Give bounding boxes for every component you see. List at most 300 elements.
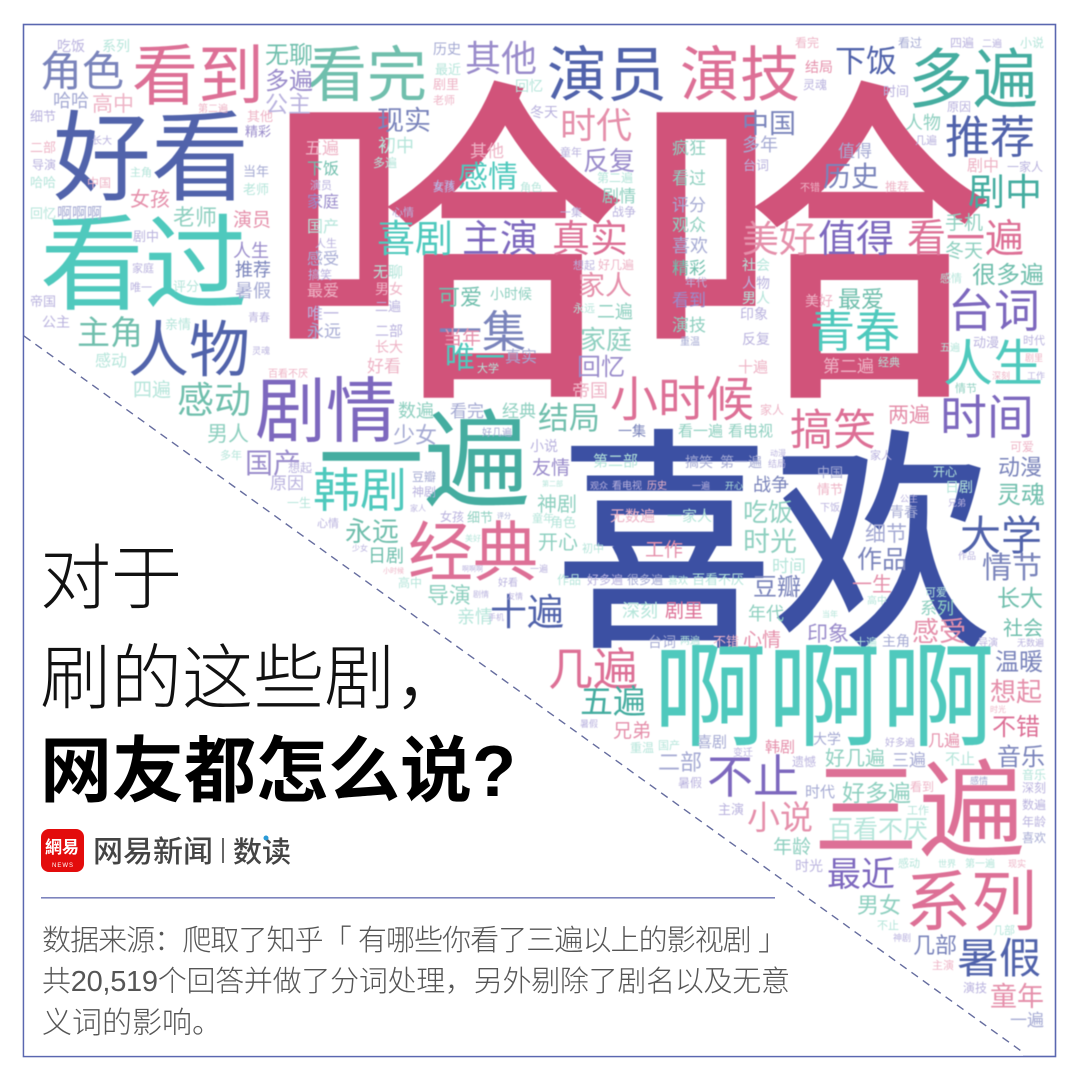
word group: small words left: 老师 — [243, 182, 269, 197]
word group: words inside second 哈: 感受 — [912, 617, 966, 647]
word group: words around 喜欢: 喜欢 — [668, 574, 688, 587]
word group: words inside second 哈: 时间 — [883, 84, 909, 99]
word group: words inside first 哈: 真实 — [505, 348, 537, 366]
word group: words inside second 哈: 公主 — [900, 493, 918, 504]
word group: words inside first 哈: 感情 — [458, 161, 518, 194]
word group: small words left: 唯一 — [130, 281, 152, 294]
word group: medium words: 真实 — [552, 219, 628, 261]
word: 经典: 经典 — [408, 516, 538, 589]
word group: words inside first 哈: 第二遍 — [597, 171, 633, 185]
word group: small words bottom right: 喜剧 — [697, 734, 727, 751]
word group: words around 喜欢: 时间 — [772, 557, 806, 576]
word group: small words bottom right: 演技 — [963, 980, 987, 995]
word group: words inside first 哈: 心情 — [392, 206, 414, 219]
word group: medium words: 小时候 — [610, 374, 754, 427]
word group: small words left: 百看不厌 — [268, 367, 308, 380]
word: 好看: 好看 — [53, 103, 249, 213]
word group: words inside second 哈: 印象 — [740, 306, 768, 322]
word group: words inside first 哈: 反复 — [583, 146, 635, 176]
word group: words inside first 哈: 好看 — [367, 357, 401, 376]
word group: small words left: 公主 — [42, 314, 70, 330]
word group: words around 喜欢: 历史 — [647, 480, 667, 492]
word group: words inside second 哈: 日剧 — [945, 479, 973, 495]
word group: words inside first 哈: 经典 — [502, 402, 536, 421]
word group: words inside second 哈: 中国 — [817, 465, 843, 480]
brand name: 网易新闻 — [93, 836, 213, 869]
word group: words inside second 哈: 剧里 — [1025, 353, 1043, 363]
word group: medium words: 主角 — [77, 314, 143, 351]
word group: small words left: 多年 — [220, 448, 242, 462]
word: 剧情: 剧情 — [255, 373, 397, 452]
word group: words inside second 哈: 青春 — [890, 504, 918, 520]
word group: words inside second 哈: 人物 — [742, 275, 770, 291]
word group: words inside first 哈: 看完 — [450, 402, 484, 421]
word group: medium words: 人生 — [943, 336, 1043, 392]
word group: words inside second 哈 — [572, 35, 1045, 647]
word group: words around 喜欢: 工作 — [645, 539, 683, 561]
word group: words inside first 哈: 无聊 — [373, 264, 403, 281]
word group: words inside second 哈: 家人 — [870, 448, 892, 462]
word group: words inside first 哈: 感受 — [307, 250, 339, 268]
word group: words inside second 哈: 四遍 — [950, 36, 974, 50]
word group: medium words: 值得 — [818, 219, 894, 261]
word group: small words bottom right: 深刻 — [1022, 781, 1046, 795]
word group: words inside first 哈: 豆瓣 — [412, 470, 436, 484]
word group: words inside first 哈: 最近 — [435, 62, 461, 77]
word group: small words left: 精彩 — [245, 124, 271, 139]
word group: words inside second 哈: 美好 — [805, 293, 833, 309]
word group: words around 喜欢: 角色 — [550, 515, 576, 530]
word group: words inside second 哈: 两遍 — [888, 404, 930, 427]
word group: medium words: 五遍 — [580, 683, 646, 720]
word group: medium words: 剧中 — [968, 172, 1042, 213]
word group: small words bottom right: 数遍 — [1022, 797, 1046, 812]
word group: words inside first 哈: 啊啊啊 — [462, 565, 483, 573]
word group: small words left: 男人 — [207, 423, 249, 446]
word group: small words bottom right: 好多遍 — [842, 780, 911, 806]
word group: words inside first 哈: 冬天 — [530, 104, 558, 120]
word group: small words left: 女孩 — [130, 188, 170, 211]
icon: netease news red square — [41, 829, 84, 872]
word: 看到: 看到 — [132, 39, 264, 113]
word group: medium words: 最近 — [827, 856, 895, 894]
word group: words around 喜欢: 小说 — [530, 438, 558, 454]
word group: small words left — [30, 38, 422, 590]
word group: words inside second 哈: 情节 — [817, 482, 843, 497]
word group: small words left: 家庭 — [132, 261, 154, 275]
word group: words inside second 哈: 社会 — [1003, 617, 1043, 640]
word group: words around 喜欢: 初中 — [582, 541, 604, 555]
word group: small words left: 少女 — [352, 543, 368, 553]
word group: words inside second 哈: 动漫 — [973, 335, 999, 350]
word group: words inside second 哈: 下饭 — [820, 502, 840, 514]
word group: words around 喜欢: 一遍 — [530, 563, 548, 574]
word group: words inside first 哈 — [305, 41, 636, 627]
word group: small words bottom right: 好几遍 — [825, 747, 885, 770]
word group: words around 喜欢: 看电视 — [728, 423, 773, 440]
word group: small words bottom right: 主演 — [932, 958, 954, 972]
word group: medium words: 唯一 — [445, 342, 505, 375]
word group: small words bottom right: 时光 — [990, 704, 1006, 714]
word group: words inside first 哈: 手机 — [488, 612, 504, 622]
word group: medium words: 其他 — [465, 38, 537, 79]
word group: words around 喜欢: 开心 — [538, 532, 578, 554]
word group: small words left: 小时候 — [383, 566, 404, 575]
word group: words around 喜欢: 一集 — [618, 423, 646, 439]
word group: small words left: 吃饭 — [57, 38, 85, 54]
word group: medium words: 看完 — [307, 42, 427, 109]
word group: words inside second 哈: 手机 — [945, 212, 983, 234]
word group: small words bottom right — [580, 649, 1046, 1030]
word group: words around 喜欢: 心情 — [743, 629, 781, 651]
word group: words inside first 哈: 五遍 — [305, 139, 339, 158]
word group: words inside first 哈: 回忆 — [577, 354, 625, 381]
word group: words inside first 哈: 美好 — [465, 533, 481, 543]
word group: words around 喜欢: 第二部 — [542, 479, 563, 488]
word group: medium words: 韩剧 — [313, 464, 407, 517]
word group: words around 喜欢: 作品 — [557, 573, 581, 587]
word group: words inside second 哈: 原因 — [947, 100, 971, 114]
word group: small words left: 第二遍 — [198, 102, 228, 115]
word group: words inside first 哈: 回忆 — [515, 78, 543, 94]
word group: small words left: 啊啊啊 — [57, 205, 102, 222]
word group: words inside second 哈: 不错 — [800, 181, 820, 194]
word group: medium words: 美好 — [742, 219, 816, 260]
word group: medium words: 不止 — [707, 751, 799, 803]
word group: small words bottom right: 主演 — [718, 802, 744, 817]
word: 一遍: 一遍 — [318, 403, 530, 521]
word group: small words left: 回忆 — [30, 206, 56, 221]
word group: words inside first 哈: 国产 — [307, 218, 339, 236]
word group: words around 喜欢: 无数遍 — [610, 508, 655, 525]
word group: small words bottom right: 现实 — [1008, 858, 1026, 869]
word group: small words left: 推荐 — [235, 260, 271, 280]
word group: small words left: 永远 — [345, 517, 399, 547]
word group: words inside first 哈: 永远 — [573, 301, 595, 315]
dashed diagonal divider — [24, 336, 1024, 1053]
word group: small words left: 长大 — [92, 134, 112, 147]
word group: words inside second 哈: 时代 — [1023, 334, 1045, 347]
word group: words inside first 哈: 亲情 — [457, 607, 493, 627]
word group: small words bottom right: 三遍 — [892, 751, 926, 770]
word group: words around 喜欢: 剧里 — [665, 600, 703, 622]
word group: small words bottom right: 音乐 — [997, 744, 1045, 771]
icon: netease news red square: 網易 — [45, 838, 79, 857]
word group: small words bottom right: 大学 — [813, 731, 841, 747]
word group: words inside second 哈: 推荐 — [885, 180, 909, 194]
word group: words around 喜欢: 好多遍 — [587, 573, 623, 587]
word group: words around 喜欢: 豆瓣 — [753, 574, 801, 601]
word group: small words bottom right: 想起 — [990, 677, 1042, 707]
word group: medium words: 大学 — [960, 513, 1042, 559]
word group: words around 喜欢: 看电视 — [612, 479, 642, 492]
word group: words inside second 哈: 多年 — [742, 135, 778, 155]
word group: small words left: 高中 — [398, 575, 422, 590]
word group: small words left: 灵魂 — [252, 345, 270, 356]
word group: words inside first 哈: 好看 — [498, 576, 518, 589]
word group: words around 喜欢: 第二部 — [593, 452, 638, 470]
word: 啊啊啊: 啊啊啊 — [653, 635, 995, 762]
word group: words around 喜欢: 十遍 — [855, 635, 877, 649]
word group: medium words: 一集 — [438, 308, 526, 357]
word group: medium words: 下饭 — [835, 44, 897, 79]
word group: medium words: 角色 — [40, 48, 124, 95]
word group: words inside first 哈: 数遍 — [398, 401, 434, 421]
word group: small words left: 导演 — [32, 157, 56, 172]
word group: words inside second 哈: 灵魂 — [803, 77, 827, 92]
word group: small words left: 其他 — [247, 109, 273, 124]
word group: words inside first 哈: 导演 — [427, 583, 471, 608]
word group: medium words: 十遍 — [490, 592, 564, 633]
word group: words around 喜欢: 时光 — [743, 527, 797, 557]
word group: words inside first 哈: 老师 — [433, 94, 455, 107]
word group: small words left: 人生 — [233, 241, 269, 261]
word group: words inside second 哈: 家人 — [760, 402, 784, 417]
word group: words around 喜欢: 吃饭 — [743, 499, 793, 527]
word group: medium words: 感动 — [177, 380, 251, 421]
word group: words inside first 哈: 二部 — [375, 323, 403, 339]
separator line — [41, 897, 775, 899]
word group: small words bottom right: 男女 — [857, 893, 901, 918]
word group: words inside second 哈: 很多遍 — [972, 262, 1044, 289]
word group: words around 喜欢: 一遍 — [692, 480, 710, 491]
word group: words inside first 哈: 小时候 — [490, 286, 532, 302]
word group: words inside second 哈: 可爱 — [1010, 440, 1034, 454]
word group: medium words: 小说 — [747, 799, 813, 836]
word group: words around 喜欢: 结局 — [768, 458, 786, 469]
word group: words inside first 哈: 搞笑 — [308, 267, 332, 282]
word group: words inside second 哈: 经典 — [878, 355, 900, 369]
word group: words inside first 哈: 长大 — [375, 339, 403, 355]
word group: medium words: 搞笑 — [790, 407, 876, 455]
word group: words around 喜欢: 百看不厌 — [692, 572, 744, 587]
word group: words inside second 哈: 一生 — [852, 573, 892, 596]
word group: words inside second 哈: 细节 — [865, 523, 907, 546]
word group: words inside second 哈: 第二遍 — [823, 357, 874, 376]
word group: words inside second 哈: 二遍 — [982, 37, 1002, 50]
word: 三遍: 三遍 — [813, 753, 1025, 871]
word group: words around 喜欢 — [530, 423, 1044, 651]
word group: words inside second 哈: 作品 — [857, 546, 907, 574]
word group: words inside second 哈: 看过 — [898, 36, 922, 50]
word: 演技: 演技 — [680, 42, 800, 109]
word group: small words left: 感动 — [95, 352, 127, 370]
word group: small words bottom right: 音乐 — [1022, 767, 1046, 782]
word group: medium words: 看一遍 — [907, 218, 1024, 261]
word: 人物: 人物 — [128, 316, 250, 384]
word group: small words bottom right: 不止 — [945, 751, 975, 768]
word group: words inside first 哈: 好几遍 — [598, 258, 634, 272]
word group: small words bottom right: 喜欢 — [1022, 830, 1046, 845]
word group: words around 喜欢: 开心 — [725, 481, 743, 491]
white triangle covering lower-left — [24, 336, 1023, 1056]
word group: words inside second 哈: 开心 — [933, 465, 957, 479]
source note: 义词的影响。 — [42, 1007, 222, 1040]
word group: words around 喜欢: 台词 — [648, 634, 676, 650]
word group: words inside second 哈: 情节 — [955, 382, 977, 395]
word group: words inside second 哈: 冬天 — [945, 240, 983, 262]
word group: small words bottom right: 不止 — [877, 919, 899, 932]
word group: words inside first 哈: 剧情 — [473, 589, 489, 599]
title — [40, 540, 516, 812]
word group: words around 喜欢: 神剧 — [537, 493, 577, 516]
word group: medium words: 喜剧 — [377, 219, 453, 261]
word group: words around 喜欢: 搞笑 — [685, 454, 713, 470]
word group: small words bottom right: 韩剧 — [765, 739, 795, 756]
word group: medium words: 青春 — [810, 306, 900, 357]
word group: small words left: 国产 — [245, 448, 301, 479]
word group: words inside first 哈: 友情 — [507, 591, 523, 601]
word group: small words left: 四遍 — [133, 379, 171, 401]
word group: words inside second 哈: 人物 — [905, 113, 941, 133]
word group: words inside first 哈: 细节 — [467, 510, 493, 525]
word group: words inside second 哈: 十遍 — [738, 359, 768, 376]
word group: words inside second 哈: 年代 — [685, 275, 707, 289]
word group: words around 喜欢: 动漫 — [770, 448, 786, 458]
word group: small words bottom right: 几部 — [993, 923, 1015, 937]
word group: words inside second 哈: 社会 — [742, 257, 770, 273]
word group: words inside second 哈: 疯狂 — [672, 139, 706, 158]
word group: small words bottom right: 感动 — [898, 857, 920, 870]
word group: small words left: 剧中 — [133, 229, 159, 244]
word group: medium words: 结局 — [538, 401, 600, 436]
word group: small words bottom right: 暑假 — [580, 719, 598, 729]
word group: words inside second 哈: 观众 — [672, 216, 706, 235]
word group: small words bottom right: 时代 — [805, 784, 835, 801]
word: 多遍: 多遍 — [908, 43, 1038, 116]
word group: words around 喜欢: 导演 — [978, 636, 998, 649]
word group: words inside first 哈: 最爱 — [307, 282, 339, 300]
word group: small words left: 二部 — [30, 140, 56, 155]
word group: words inside first 哈: 二遍 — [597, 302, 633, 322]
word group: small words bottom right: 暑假 — [678, 776, 702, 790]
word group: words inside second 哈: 男人 — [742, 290, 770, 306]
word group: small words left: 多遍 — [265, 68, 313, 95]
word group: small words left: 系列 — [102, 38, 130, 54]
word group: words inside first 哈: 家庭 — [307, 193, 339, 211]
word group: words around 喜欢: 不错 — [713, 634, 739, 649]
word group: small words left: 当年 — [243, 164, 269, 179]
word group: words inside second 哈: 动漫 — [998, 455, 1042, 480]
word: 演员: 演员 — [547, 42, 667, 109]
word group: words inside first 哈: 剧情 — [602, 187, 636, 206]
word group: words inside second 哈: 兄弟 — [948, 497, 966, 508]
word group: small words left: 老师 — [173, 205, 217, 230]
word group: words inside first 哈: 永远 — [307, 322, 341, 341]
word group: words inside first 哈: 当年 — [443, 327, 481, 349]
word group: small words left: 哈哈 — [30, 175, 56, 190]
word group: words around 喜欢: 主角 — [882, 633, 910, 649]
word group: small words left: 评分 — [173, 279, 199, 294]
word group: words inside first 哈: 好几遍 — [482, 426, 512, 439]
word group: words inside first 哈: 想起 — [573, 258, 595, 272]
word group: words inside first 哈: 评分 — [497, 511, 511, 520]
word group: words inside first 哈: 二遍 — [375, 299, 401, 314]
word group: small words left: 公主 — [265, 91, 311, 117]
word group: words inside second 哈: 感情 — [940, 272, 962, 285]
word group: small words bottom right: 国产 — [658, 738, 680, 752]
icon: netease news red square: NEWS — [52, 863, 74, 869]
word group: words inside second 哈: 看完 — [795, 35, 819, 50]
word group: words inside second 哈: 作品 — [958, 550, 976, 561]
word group: words inside first 哈: 女孩 — [433, 178, 455, 192]
title: 对于 — [40, 540, 182, 619]
word group: words around 喜欢: 当年 — [822, 609, 838, 619]
word group: small words bottom right: 年龄 — [1022, 815, 1046, 829]
word group: small words left: 主角 — [130, 166, 152, 179]
word group: small words left: 演员 — [233, 209, 271, 231]
word group: small words left: 帝国 — [30, 294, 56, 309]
word group: words around 喜欢: 一家人 — [667, 508, 712, 525]
word group: medium words: 几遍 — [548, 644, 638, 695]
word: 哈哈: 哈哈 — [264, 60, 998, 441]
word group: small words bottom right: 好多遍 — [885, 736, 915, 749]
word group: small words left: 高中 — [92, 93, 134, 116]
word group: small words left: 亲情 — [165, 317, 191, 332]
word group: medium words: 推荐 — [945, 112, 1035, 163]
word group: words around 喜欢: 两遍 — [680, 634, 700, 647]
word group: words inside second 哈: 系列 — [920, 599, 954, 618]
word group: small words bottom right: 变迁 — [733, 746, 753, 759]
word group: words inside first 哈: 家人 — [578, 271, 632, 301]
word group: words inside second 哈: 结局 — [805, 59, 833, 75]
word group: words inside second 哈: 一家人 — [1007, 159, 1043, 174]
word group: medium words: 情节 — [982, 552, 1042, 585]
word group: words inside first 哈: 下饭 — [307, 160, 339, 178]
word group: words inside second 哈: 重温 — [680, 335, 700, 348]
word group: small words left: 无聊 — [265, 42, 313, 69]
word group: small words left: 原因 — [270, 474, 304, 493]
word group: words inside second 哈: 中国 — [742, 109, 796, 139]
word group: words inside second 哈: 帝国 — [572, 381, 608, 401]
word group: words inside first 哈: 女孩 — [433, 180, 455, 194]
word group: small words bottom right: 神剧 — [893, 932, 911, 943]
word group: words inside second 哈: 剧中 — [967, 157, 999, 175]
word group: small words bottom right: 时光 — [795, 858, 823, 874]
word group: medium words: 台词 — [948, 285, 1040, 337]
word group: small words bottom right: 兄弟 — [613, 720, 651, 742]
word group: small words left: 心情 — [317, 517, 339, 530]
word group: small words bottom right: 一遍 — [1010, 1011, 1044, 1030]
word group: words inside first 哈: 家庭 — [580, 325, 632, 355]
word group: words inside second 哈: 灵魂 — [997, 482, 1045, 509]
word group: small words bottom right: 遗憾 — [792, 755, 816, 769]
word group: words inside second 哈: 演技 — [672, 316, 706, 335]
word group: words inside second 哈: 五遍 — [940, 341, 960, 354]
word group: words inside second 哈: 喜欢 — [672, 236, 708, 256]
word group: words inside second 哈: 看到 — [672, 291, 706, 310]
word group: words inside second 哈: 深刻 — [992, 370, 1010, 381]
word group: words inside first 哈: 神剧 — [412, 485, 436, 499]
word group: medium words: 暑假 — [957, 935, 1041, 982]
word group: small words left: 中国 — [87, 175, 111, 190]
word group: small words left: 哈哈 — [53, 91, 89, 111]
word: 喜欢: 喜欢 — [555, 416, 991, 679]
word group: words inside first 哈: 演员 — [310, 178, 332, 192]
word group: small words left: 青春 — [248, 311, 270, 324]
source note: 数据来源：爬取了知乎「 有哪些你看了三遍以上的影视剧 」 — [42, 924, 787, 957]
word group: words inside first 哈: 角色 — [520, 180, 542, 194]
title: 网友都怎么说? — [40, 732, 516, 812]
source note — [42, 924, 790, 1040]
word group: small words bottom right: 几部 — [913, 933, 957, 958]
word group: small words bottom right: 第一遍 — [965, 857, 995, 870]
word group: words inside first 哈: 女孩 — [440, 509, 464, 524]
word group: medium words: 时代 — [560, 105, 632, 146]
word group: small words bottom right: 温暖 — [995, 649, 1043, 676]
word group: words around 喜欢: 看一遍 — [678, 423, 723, 440]
word: 系列: 系列 — [905, 865, 1037, 939]
